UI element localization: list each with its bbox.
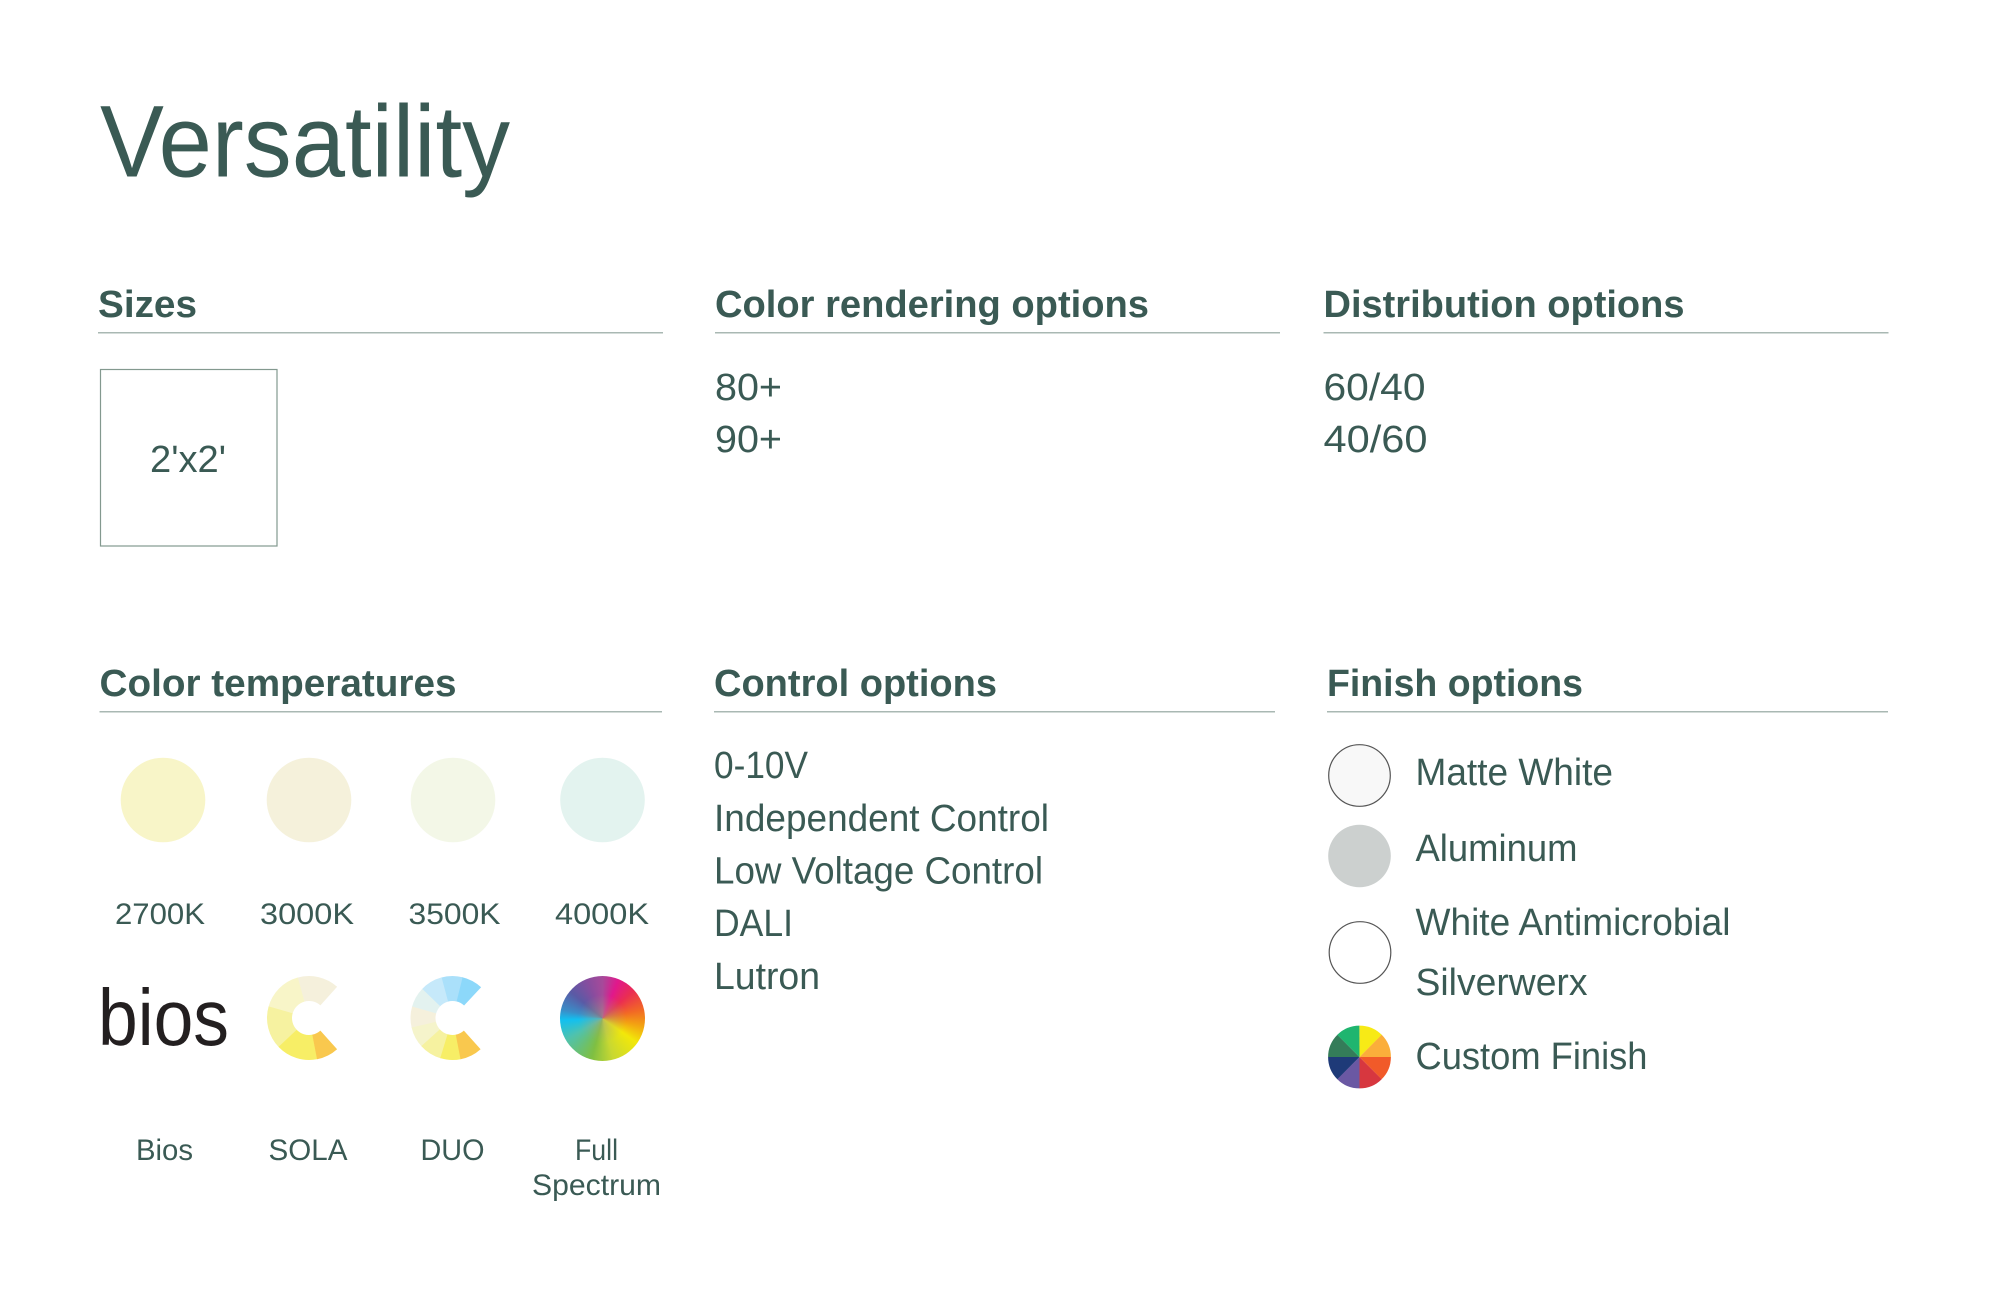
finish: Matte White — [1329, 745, 1613, 806]
swatch: 3000K: 3000K — [260, 898, 354, 931]
panel: control options: Control options — [714, 663, 997, 705]
panel: control options — [714, 663, 1275, 998]
finish: Aluminum: Aluminum — [1416, 828, 1578, 870]
panel: control options: 0-10V — [714, 745, 809, 787]
panel: color temperatures: Color temperatures — [100, 663, 456, 705]
panel: distribution options — [1324, 284, 1888, 461]
option: Bios logo — [98, 973, 229, 1167]
option: DUO: DUO — [420, 1134, 484, 1167]
swatch: 3000K — [260, 758, 354, 931]
panel: color rendering options: Color rendering options — [715, 284, 1149, 326]
size box 2'x2' — [100, 370, 277, 546]
size box 2'x2': 2'x2' — [150, 439, 226, 481]
panel: distribution options: Distribution options — [1324, 284, 1684, 326]
finish: Aluminum — [1328, 825, 1578, 887]
option: Bios logo: bios — [98, 973, 229, 1062]
finish: White Antimicrobial and Silverwerx: Silverwerx — [1416, 962, 1588, 1004]
option: DUO — [411, 976, 494, 1167]
option: SOLA — [267, 976, 351, 1167]
panel: color temperatures — [98, 663, 662, 1202]
swatch: 2700K — [115, 758, 205, 931]
finish: Custom Finish: Custom Finish — [1416, 1036, 1648, 1078]
panel: distribution options: 60/40 — [1324, 367, 1426, 409]
panel: color rendering options: 90+ — [715, 419, 782, 461]
panel: sizes: Sizes — [98, 284, 197, 326]
option: Full Spectrum: Full — [575, 1134, 618, 1167]
option: Full Spectrum — [532, 976, 661, 1202]
panel: control options: DALI — [714, 903, 793, 945]
panel: control options: Lutron — [714, 956, 820, 998]
option: SOLA: SOLA — [268, 1134, 348, 1167]
finish: White Antimicrobial and Silverwerx — [1329, 902, 1730, 1004]
finish: Custom Finish — [1337, 1035, 1648, 1079]
option: Full Spectrum: Spectrum — [532, 1169, 661, 1202]
panel: color rendering options — [715, 284, 1280, 461]
swatch: 4000K: 4000K — [555, 898, 649, 931]
panel: distribution options: 40/60 — [1324, 419, 1428, 461]
option: Bios logo: Bios — [136, 1134, 193, 1167]
swatch: 4000K — [555, 758, 649, 931]
title: Versatility — [100, 84, 510, 198]
panel: finish options — [1327, 663, 1888, 1079]
finish: White Antimicrobial and Silverwerx: White Antimicrobial — [1416, 902, 1730, 944]
panel: finish options: Finish options — [1327, 663, 1583, 705]
swatch: 3500K: 3500K — [408, 898, 500, 931]
finish: Matte White: Matte White — [1416, 752, 1613, 794]
swatch: 3500K — [408, 758, 500, 931]
swatch: 2700K: 2700K — [115, 898, 205, 931]
panel: control options: Low Voltage Control — [714, 850, 1043, 892]
panel: sizes — [98, 284, 663, 546]
panel: control options: Independent Control — [714, 798, 1049, 840]
panel: color rendering options: 80+ — [715, 367, 782, 409]
